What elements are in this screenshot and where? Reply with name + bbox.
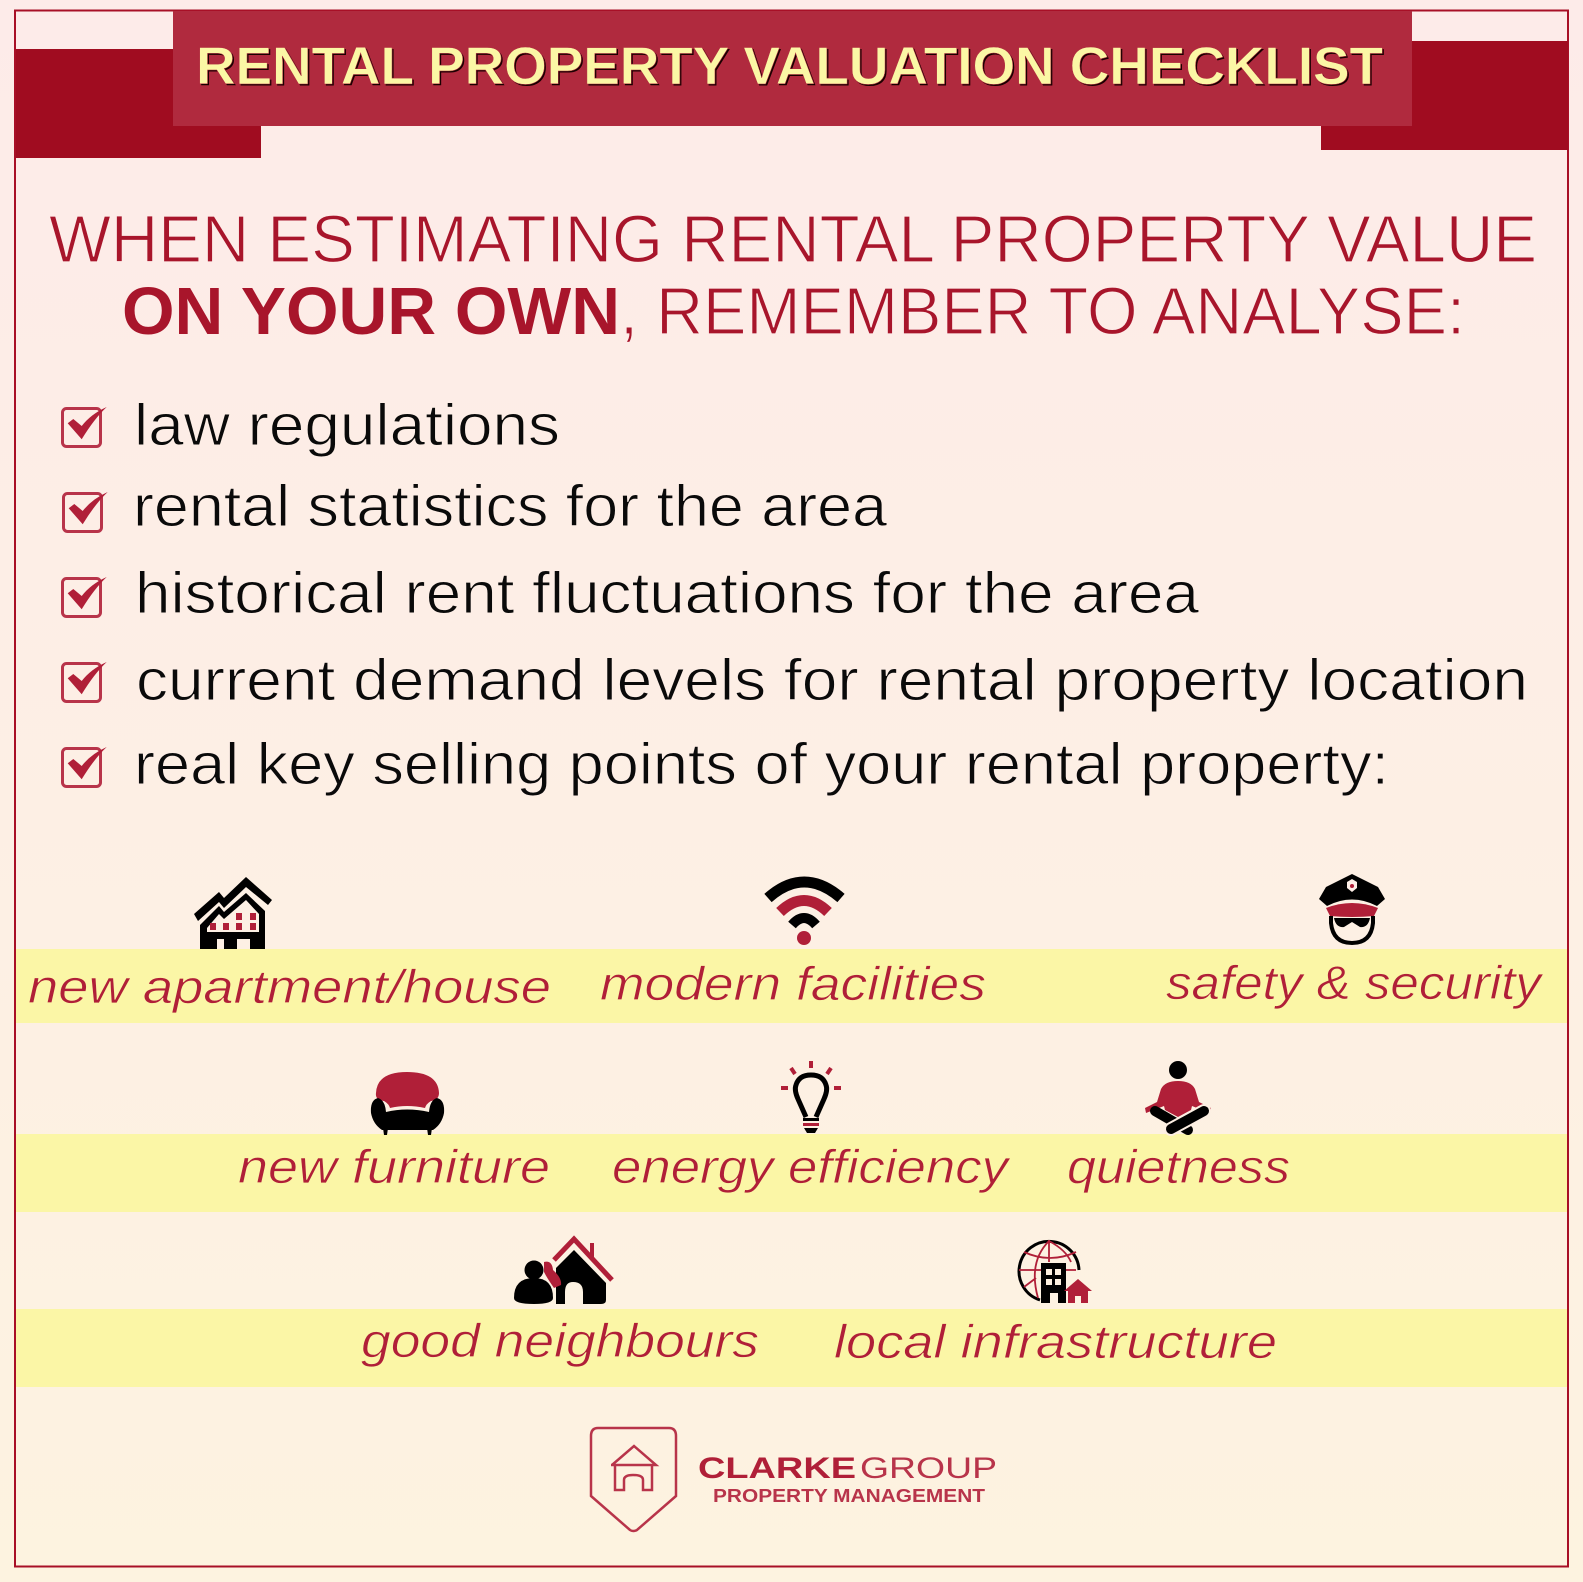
- icon: meditating person: [1145, 1061, 1211, 1130]
- item: key selling points: real key selling points of your rental property:: [134, 732, 1389, 797]
- icon: globe with buildings: [1019, 1240, 1092, 1303]
- label: modern facilities: modern facilities: [600, 957, 986, 1010]
- icon: police officer: [1319, 874, 1385, 943]
- title banner: RENTAL PROPERTY VALUATION CHECKLIST: [196, 37, 1383, 96]
- heading: [49, 202, 1537, 349]
- heading: , REMEMBER TO ANALYSE:: [620, 274, 1465, 349]
- icon: good neighbours: [514, 1239, 612, 1304]
- item: current demand: current demand levels for rental property location: [136, 648, 1528, 713]
- icon: light bulb: [781, 1061, 841, 1133]
- heading: ON YOUR OWN: [122, 274, 620, 349]
- logo tagline: PROPERTY MANAGEMENT: [713, 1486, 985, 1506]
- item: law regulations: law regulations: [134, 393, 560, 458]
- header ribbon: left block: [16, 49, 261, 158]
- header ribbon: right block: [1321, 41, 1568, 150]
- logo wordmark: clarke: CLARKE: [698, 1452, 856, 1485]
- icon: armchair: [371, 1072, 444, 1135]
- item: rental statistics: rental statistics for the area: [133, 474, 888, 539]
- icon: apartment house: [194, 877, 272, 949]
- item: historical rent fluctuations: historical rent fluctuations for the area: [135, 561, 1200, 626]
- band row 2: [16, 1134, 1567, 1212]
- label: safety and security: safety & security: [1166, 956, 1544, 1009]
- logo wordmark: group: GROUP: [860, 1452, 997, 1485]
- label: energy efficiency: energy efficiency: [612, 1140, 1011, 1193]
- logo shield: [591, 1428, 676, 1531]
- label: new furniture: new furniture: [238, 1140, 550, 1193]
- label: local infrastructure: local infrastructure: [834, 1315, 1277, 1368]
- band row 3: [16, 1309, 1567, 1387]
- band row 1: [16, 949, 1567, 1023]
- logo: [591, 1428, 997, 1531]
- heading: WHEN ESTIMATING RENTAL PROPERTY VALUE: [49, 202, 1537, 277]
- label: good neighbours: good neighbours: [361, 1314, 759, 1367]
- icon: wifi: [768, 882, 841, 945]
- title banner: [173, 11, 1412, 126]
- label: new apartment/house: new apartment/house: [28, 960, 551, 1013]
- logo house: [611, 1446, 656, 1490]
- title banner: RENTAL PROPERTY VALUATION CHECKLIST: [198, 38, 1384, 98]
- label: quietness: quietness: [1067, 1140, 1290, 1193]
- checklist: [62, 393, 1528, 797]
